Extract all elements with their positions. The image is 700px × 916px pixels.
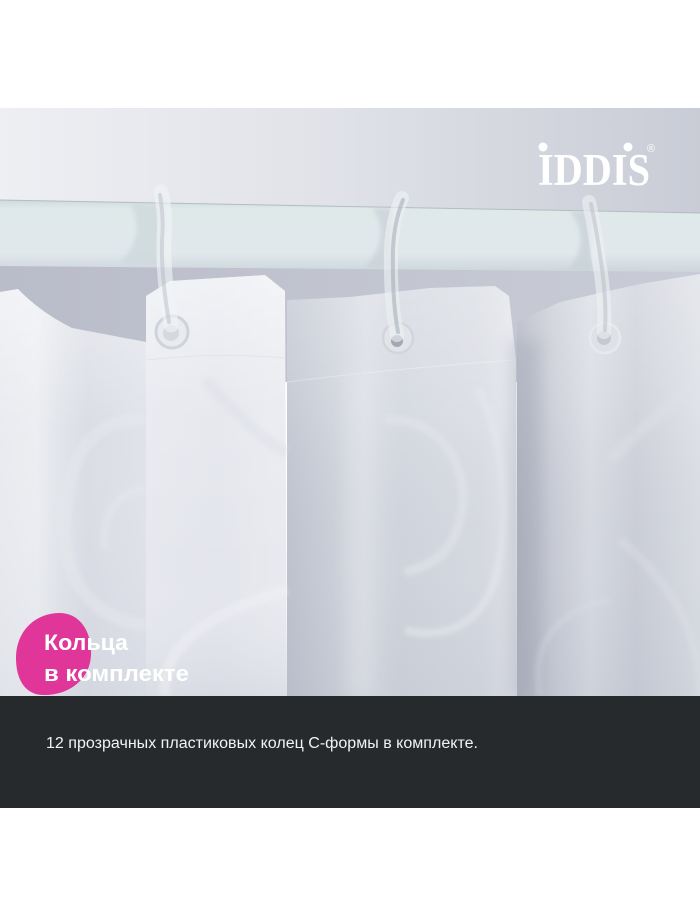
wall below rod: [0, 262, 700, 382]
logo: IDDIS: ®: [647, 143, 655, 155]
ring 3: [589, 202, 620, 353]
logo: IDDIS: IDDIS: [538, 145, 650, 195]
curtain panel: far left: [0, 289, 146, 696]
pink blob badge: [16, 613, 91, 695]
badge heading: [46, 634, 188, 681]
badge heading: в комплекте: [44, 661, 189, 686]
curtain panel: front: [146, 275, 287, 696]
ring 1: [156, 192, 188, 348]
curtain panel: right: [510, 274, 700, 696]
wall above rod: [0, 108, 700, 218]
curtain panel: back centre: [287, 286, 517, 696]
dark caption band: [0, 696, 700, 808]
curtain rod: [0, 200, 700, 272]
caption text: 12 прозрачных пластиковых колец С-формы в комплекте.: [46, 735, 478, 752]
photo: shower curtain on rod: [0, 108, 700, 696]
ring 2: [383, 198, 413, 353]
badge heading: Кольца: [44, 630, 129, 655]
infographic canvas: [0, 108, 700, 808]
